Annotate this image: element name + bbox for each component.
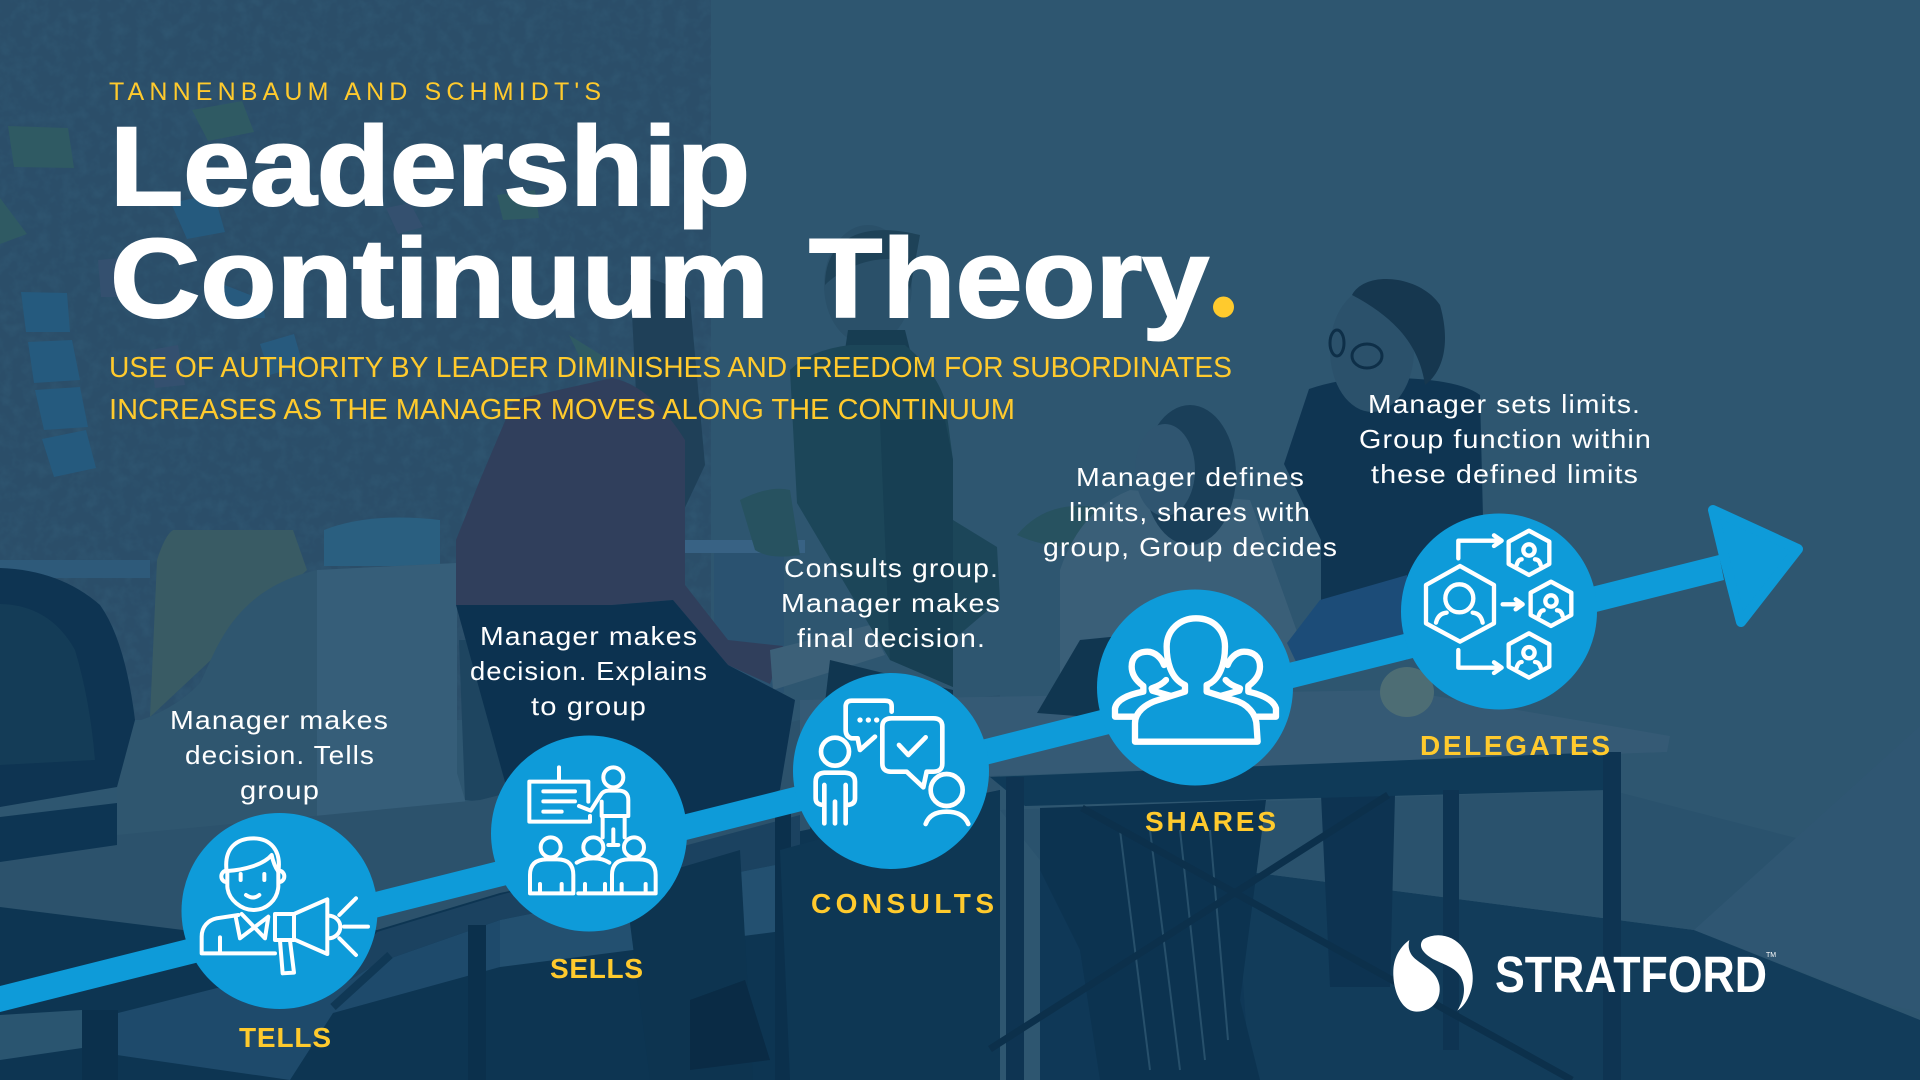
icon: presenter with audience [529, 767, 656, 893]
icon: group of three people [1115, 618, 1276, 742]
step 2: sells [470, 621, 708, 984]
tells description [170, 705, 389, 805]
subtitle: use of authority statement: INCREASES AS THE MANAGER MOVES ALONG THE CONTINUUM [109, 394, 1015, 426]
woman: green turtleneck [780, 225, 1000, 1080]
shares description: group, Group decides [1043, 532, 1338, 562]
shares description: limits, shares with [1069, 497, 1311, 527]
sells description: to group [531, 691, 647, 721]
shares description: Manager defines [1076, 462, 1305, 492]
consults description: final decision. [797, 623, 986, 653]
step 3: consults [781, 553, 1001, 919]
logo: Stratford [1393, 935, 1776, 1012]
woman: maroon top [456, 275, 885, 1080]
consults description [781, 553, 1001, 653]
consults circle [793, 673, 989, 869]
trend arrow: rising continuum line with arrowhead [0, 510, 1798, 1012]
woman: laughing with glasses [1284, 279, 1486, 987]
step 1: tells [170, 705, 389, 1053]
consults description: Manager makes [781, 588, 1001, 618]
shares label: SHARES [1145, 806, 1276, 837]
woman: seated with white shirt [1037, 405, 1300, 1080]
delegates description: Group function within [1359, 424, 1652, 454]
step 5: delegates [1359, 389, 1652, 761]
title: Leadership Continuum Theory [110, 104, 1237, 341]
sells label: SELLS [550, 953, 643, 984]
subtitle: use of authority statement [109, 352, 1232, 426]
delegates description: these defined limits [1371, 459, 1639, 489]
logo swoosh mark [1393, 935, 1473, 1012]
icon: two people with speech bubbles [816, 701, 968, 824]
sells description: Manager makes [480, 621, 698, 651]
logo wordmark: STRATFORD [1495, 946, 1767, 1003]
shares description [1043, 462, 1338, 562]
tells description: group [240, 775, 320, 805]
tells description: decision. Tells [185, 740, 375, 770]
tells label: TELLS [239, 1022, 331, 1053]
icon: leader hexagon delegating to three hexagons [1426, 531, 1571, 678]
title: Leadership Continuum Theory: . [1218, 249, 1237, 327]
tells description: Manager makes [170, 705, 389, 735]
delegates label: DELEGATES [1420, 730, 1610, 761]
icon: man with megaphone [202, 838, 368, 973]
title: Leadership Continuum Theory: Continuum [110, 216, 769, 341]
consults description: Consults group. [784, 553, 999, 583]
sells description [470, 621, 708, 721]
sells description: decision. Explains [470, 656, 708, 686]
shares circle [1097, 590, 1293, 786]
subtitle: use of authority statement: USE OF AUTHORITY BY LEADER DIMINISHES AND FREEDOM FOR SUBORDINATES [109, 352, 1232, 384]
title: Leadership Continuum Theory: Theory [809, 216, 1209, 341]
sells circle [491, 736, 687, 932]
title: Leadership Continuum Theory: Leadership [110, 104, 750, 229]
delegates description: Manager sets limits. [1368, 389, 1641, 419]
trademark: TM [1766, 952, 1776, 959]
delegates circle [1401, 514, 1597, 710]
eyebrow: theory authors: TANNENBAUM AND SCHMIDT'S [109, 78, 601, 106]
tells circle [182, 813, 378, 1009]
delegates description [1359, 389, 1652, 489]
consults label: CONSULTS [811, 888, 994, 919]
step 4: shares [1043, 462, 1338, 837]
